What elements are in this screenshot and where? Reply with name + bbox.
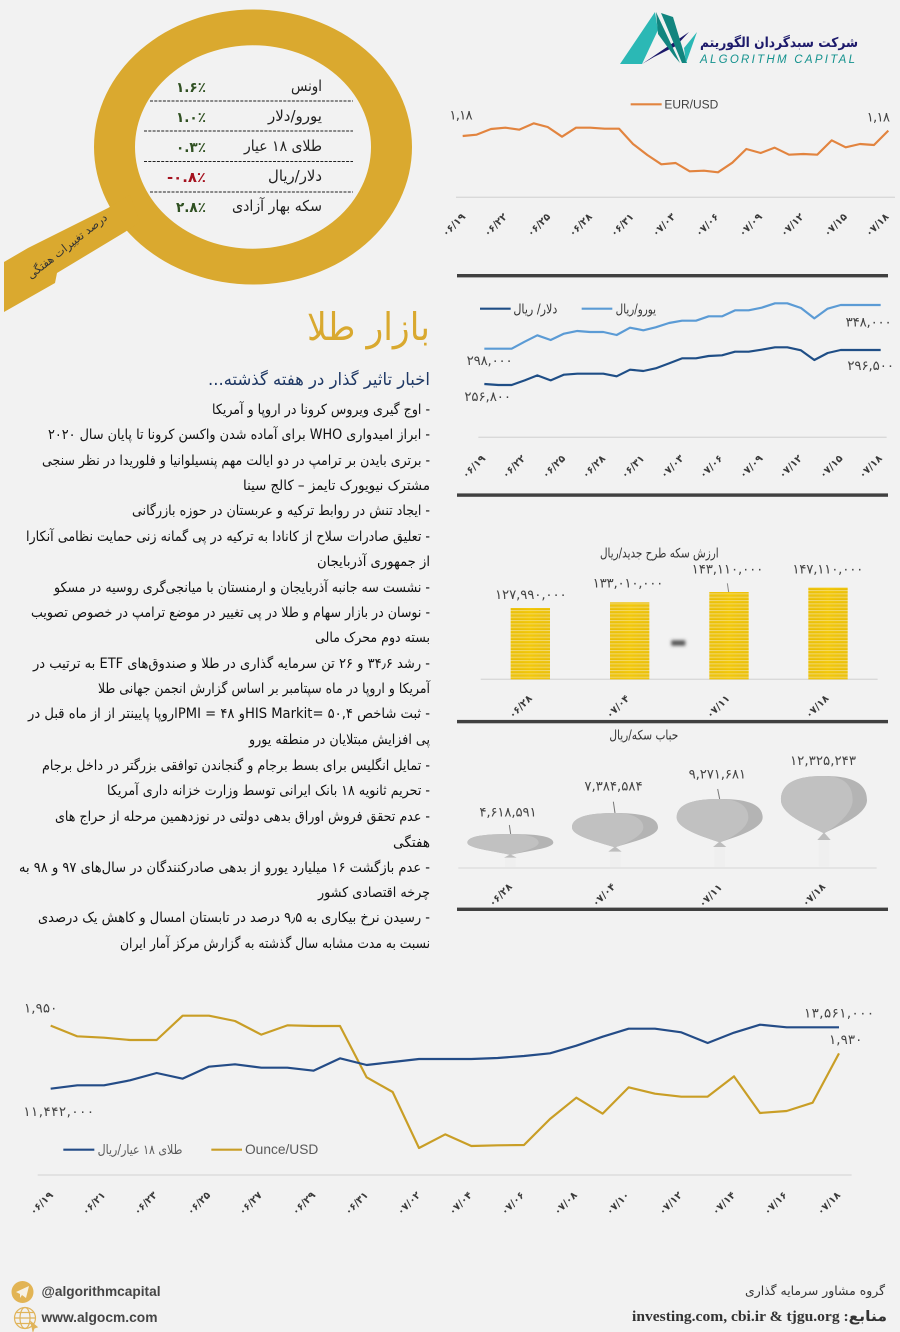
chart title: حباب سکه/ریال [609,728,678,743]
date axis: ۰۷/۰۹ [738,453,765,481]
balloon 06/28 [467,825,553,858]
date axis: ۰۷/۱۱ [705,693,732,721]
value labels [23,1002,874,1120]
coin bar 07/04 [610,602,649,679]
date axis: ۰۷/۰۴ [591,882,618,909]
date axis: ۰۷/۰۲ [396,1190,423,1218]
logo: Algorithm Capital [620,12,858,66]
date axis: ۰۷/۰۸ [552,1190,580,1218]
date axis: ۰۶/۲۵ [186,1190,213,1218]
news list: - تعلیق صادرات سلاح از کانادا به ترکیه در پی گمانه زنی حمایت نظامی آنکارا [26,528,430,545]
news list: - رسیدن نرخ بیکاری به ۹٫۵ درصد در تابستان امسال و کاهش یک درصدی [38,910,430,926]
company latin name: ALGORITHM CAPITAL [699,54,855,66]
date axis: ۰۷/۱۲ [779,212,806,239]
date axis: ۰۷/۰۶ [694,212,721,239]
balloon 07/18 [781,776,867,840]
date axis: ۰۷/۰۶ [698,453,725,481]
company name: شرکت سبدگردان الگوریتم [700,34,858,51]
value labels: ۲۹۸,۰۰۰ [467,354,513,369]
date axis: ۰۶/۲۷ [237,1190,265,1218]
EUR/USD line [463,123,888,172]
date axis: ۰۶/۳۱ [609,212,636,239]
date axis: ۰۶/۲۱ [81,1190,108,1218]
icon: globe [14,1308,37,1331]
value labels: ۱۳,۵۶۱,۰۰۰ [804,1007,874,1022]
chart: dollar and euro in rial [461,302,894,481]
value labels [464,316,894,405]
date axis [487,882,828,910]
row: dollar/rial: -۰.۸٪ [167,170,206,186]
balloon 07/11 [677,789,763,847]
date axis: ۰۷/۱۸ [816,1190,843,1218]
value labels: ۲۹۶,۵۰۰ [847,359,894,374]
date axis: ۰۷/۰۳ [659,453,686,481]
news list: بسته دوم محرک مالی [315,630,430,646]
row: euro/dollar [176,107,322,126]
legend: ounce/USD: Ounce/USD [245,1141,318,1157]
chart: coin bubble [458,728,877,910]
date axis: ۰۶/۱۹ [441,212,468,239]
date axis: ۰۶/۲۲ [501,453,528,481]
news list: هفتگی [393,834,430,851]
legend: euro/rial [582,302,656,317]
news list: - عدم بازگشت ۱۶ میلیارد یورو از بدهی صادرکنندگان در سال‌های ۹۷ و ۹۸ به [19,859,430,876]
magnifier handle [4,195,140,312]
value labels: ۹,۲۷۱,۶۸۱ [689,767,746,782]
dollar/rial line [484,347,881,385]
date axis: ۰۷/۰۹ [737,212,765,239]
date axis [461,453,885,481]
group name: گروه مشاور سرمایه گذاری [745,1283,885,1299]
news list: - اوج گیری ویروس کرونا در اروپا و آمریکا [212,401,430,418]
news list: - ثبت شاخص ۵۰,۴ =HIS Markitو ۴۸ = PMIاروپا پایینتر از از ماه قبل در [27,706,430,722]
row: ounce [176,77,322,96]
news list: - عدم تحقق فروش اوراق بدهی دولتی در نوزدهمین مرحله از حراج های [55,809,430,825]
row: euro/dollar: ۱.۰٪ [176,110,206,126]
row: ounce: اونس [291,77,322,95]
chart: new design coin value [481,546,878,721]
date axis [441,212,891,239]
news list: - تمایل انگلیس برای بسط برجام و گنجاندن توافقی بزرگتر در داخل برجام [42,757,430,774]
news list: نسبت به مدت مشابه سال گذشته به گزارش مرکز آمار ایران [120,935,430,952]
coin bar 06/28 [511,608,550,679]
legend [631,97,719,111]
footer: contacts [12,1281,160,1331]
telegram handle: @algorithmcapital [42,1284,160,1300]
title: بازار طلا [307,305,430,349]
row: bahar azadi coin: ۲.۸٪ [176,200,206,216]
legend: dollar/rial [480,302,558,317]
news list: - نشست سه جانبه آذربایجان و ارمنستان با میانجی‌گری روسیه در مسکو [53,579,430,596]
date axis: ۰۷/۰۳ [651,212,678,239]
legend: ounce/USD [211,1141,318,1157]
row: ounce: ۱.۶٪ [176,80,206,96]
date axis: ۰۶/۲۸ [581,453,608,481]
sources: investing.com, cbi.ir & tjgu.org :منابع [632,1309,887,1325]
chart title: ارزش سکه طرح جدید/ریال [600,546,719,561]
value labels: ۱,۹۳۰ [829,1033,862,1048]
start value: ۱,۱۸ [449,108,473,123]
euro/rial line [484,303,881,349]
value labels: ۱۲۷,۹۹۰,۰۰۰ [495,588,567,603]
value labels: ۱۲,۳۲۵,۲۴۳ [790,754,856,769]
news list: مشترک نیویورک تایمز – کالج سینا [243,478,430,494]
news list: - ایجاد تنش در روابط ترکیه و عربستان در حوزه بازرگانی [132,502,430,519]
value labels: ۱۳۳,۰۱۰,۰۰۰ [593,576,663,591]
date axis: ۰۷/۱۸ [857,453,885,481]
row: bahar azadi coin [176,197,322,216]
row: 18k gold: ۰.۳٪ [176,140,206,156]
news list: آمریکا و اروپا در ماه سپتامبر بر اساس گزارش انجمن جهانی طلا [98,680,431,697]
news list: - رشد ۳۴٫۶ و ۲۶ تن سرمایه گذاری در طلا و صندوق‌های ETF به ترتیب در [32,655,430,672]
date axis: ۰۶/۲۸ [567,212,595,239]
value labels: ۱۴۷,۱۱۰,۰۰۰ [792,562,863,577]
logo mark [620,12,697,64]
date axis: ۰۶/۲۹ [291,1190,318,1218]
news list: - برتری بایدن بر ترامپ در دو ایالت مهم پنسیلوانیا و فلوریدا در نظر سنجی [42,453,430,469]
date axis: ۰۶/۲۸ [487,882,515,909]
date axis: ۰۶/۲۵ [541,453,568,481]
legend: dollar/rial: دلار/ ریال [513,302,558,317]
coin bar 07/18 [808,588,848,679]
legend: 18k gold: طلای ۱۸ عیار/ریال [98,1143,182,1158]
website: www.algocm.com [41,1310,158,1326]
handle caption: درصد تغییرات هفتگی [24,210,110,282]
row: 18k gold [176,137,322,156]
row: bahar azadi coin: سکه بهار آزادی [232,197,322,215]
date axis [507,693,831,721]
magnifier: weekly changes [4,10,412,312]
end value: ۱,۱۸ [867,111,890,126]
date axis: ۰۶/۱۹ [28,1190,56,1218]
news list: - ابراز امیدواری WHO برای آماده شدن واکسن کرونا تا پایان سال ۲۰۲۰ [48,426,430,443]
legend: EUR/USD [664,97,719,111]
value labels: ۷,۳۸۴,۵۸۴ [584,780,643,795]
news list: - تحریم ثانویه ۱۸ بانک ایرانی توسط وزارت خزانه داری آمریکا [107,782,430,799]
date axis: ۰۶/۳۱ [343,1190,371,1218]
row: 18k gold: طلای ۱۸ عیار [243,137,322,155]
value labels: ۲۵۶,۸۰۰ [464,390,511,405]
date axis: ۰۶/۱۹ [461,453,488,481]
date axis: ۰۷/۱۵ [818,453,845,481]
date axis: ۰۷/۰۶ [500,1190,527,1218]
news list: پی افزایش مبتلایان در منطقه یورو [248,732,430,748]
legend: 18k gold [63,1143,182,1158]
chart: gold and ounce [23,1002,874,1218]
date axis: ۰۷/۱۸ [864,212,891,239]
date axis: ۰۷/۱۶ [762,1190,790,1218]
date axis: ۰۶/۳۱ [620,453,647,481]
date axis: ۰۷/۱۲ [657,1190,685,1218]
date axis: ۰۷/۱۸ [804,693,831,721]
value labels: ۳۴۸,۰۰۰ [846,316,892,331]
footer: sources [632,1283,887,1325]
value labels: ۱,۹۵۰ [24,1002,57,1017]
date axis: ۰۷/۰۴ [605,693,632,721]
legend: euro/rial: یورو/ریال [616,302,656,317]
news list: چرخه اقتصادی کشور [317,885,430,901]
date axis: ۰۶/۲۵ [526,212,553,239]
value labels: ۴,۶۱۸,۵۹۱ [479,806,537,821]
coin bar 07/11 [709,592,749,679]
value labels: ۱۴۳,۱۱۰,۰۰۰ [692,562,763,577]
balloon 07/04 [572,802,658,852]
news heading: اخبار تاثیر گذار در هفته گذشته... [208,369,430,390]
news list: - نوسان در بازار سهام و طلا در پی تغییر در موضع ترامپ در خصوص تصویب [31,605,430,621]
news list [19,401,431,952]
date axis: ۰۶/۲۲ [482,212,510,239]
value labels: ۱۱,۴۴۲,۰۰۰ [23,1105,94,1120]
date axis: ۰۷/۱۸ [801,882,828,909]
icon: telegram [12,1281,34,1303]
18k gold line [51,1025,839,1089]
chart: EUR/USD [441,97,895,239]
date axis: ۰۷/۱۱ [697,882,725,910]
news list: از جمهوری آذربایجان [317,553,430,570]
date axis: ۰۷/۱۴ [711,1190,738,1218]
date axis: ۰۷/۱۰ [605,1190,632,1218]
row: dollar/rial [167,167,322,186]
row: dollar/rial: دلار/ریال [268,167,322,185]
date axis: ۰۷/۰۴ [447,1190,475,1218]
value labels [479,754,856,821]
ounce/USD line [51,1016,839,1148]
value labels [495,562,863,603]
date axis: ۰۶/۲۸ [507,693,535,721]
magnifier ring and handle [94,10,412,285]
date axis: ۰۷/۱۵ [822,212,850,239]
date axis: ۰۶/۲۳ [132,1190,160,1218]
date axis: ۰۷/۱۲ [777,453,805,481]
row: euro/dollar: یورو/دلار [267,107,322,125]
date axis [28,1190,843,1218]
